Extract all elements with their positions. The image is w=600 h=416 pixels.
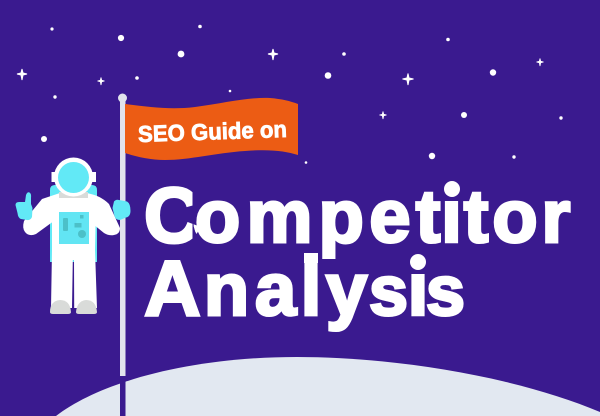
flag banner xyxy=(125,98,298,160)
starfield xyxy=(17,25,563,164)
tall ascender of l in Analysis xyxy=(304,253,318,263)
moon surface xyxy=(56,357,600,416)
round dot on i of Competitor xyxy=(444,181,460,199)
right arm xyxy=(86,193,120,235)
torso and legs xyxy=(51,193,97,308)
right glove xyxy=(112,200,130,220)
title line 1: Competitor xyxy=(144,171,570,259)
title xyxy=(144,171,570,332)
left arm xyxy=(23,193,60,235)
flag text: SEO Guide on xyxy=(138,116,287,147)
flag pole xyxy=(118,94,127,416)
backpack xyxy=(50,185,97,262)
astronaut xyxy=(16,158,130,314)
chest panel xyxy=(59,212,89,244)
round dot on i of Analysis xyxy=(410,254,426,272)
boots xyxy=(50,300,71,314)
left glove thumbs up xyxy=(16,192,32,220)
helmet xyxy=(52,158,96,196)
title line 2: Analysis xyxy=(144,244,465,332)
neck collar xyxy=(59,192,88,198)
